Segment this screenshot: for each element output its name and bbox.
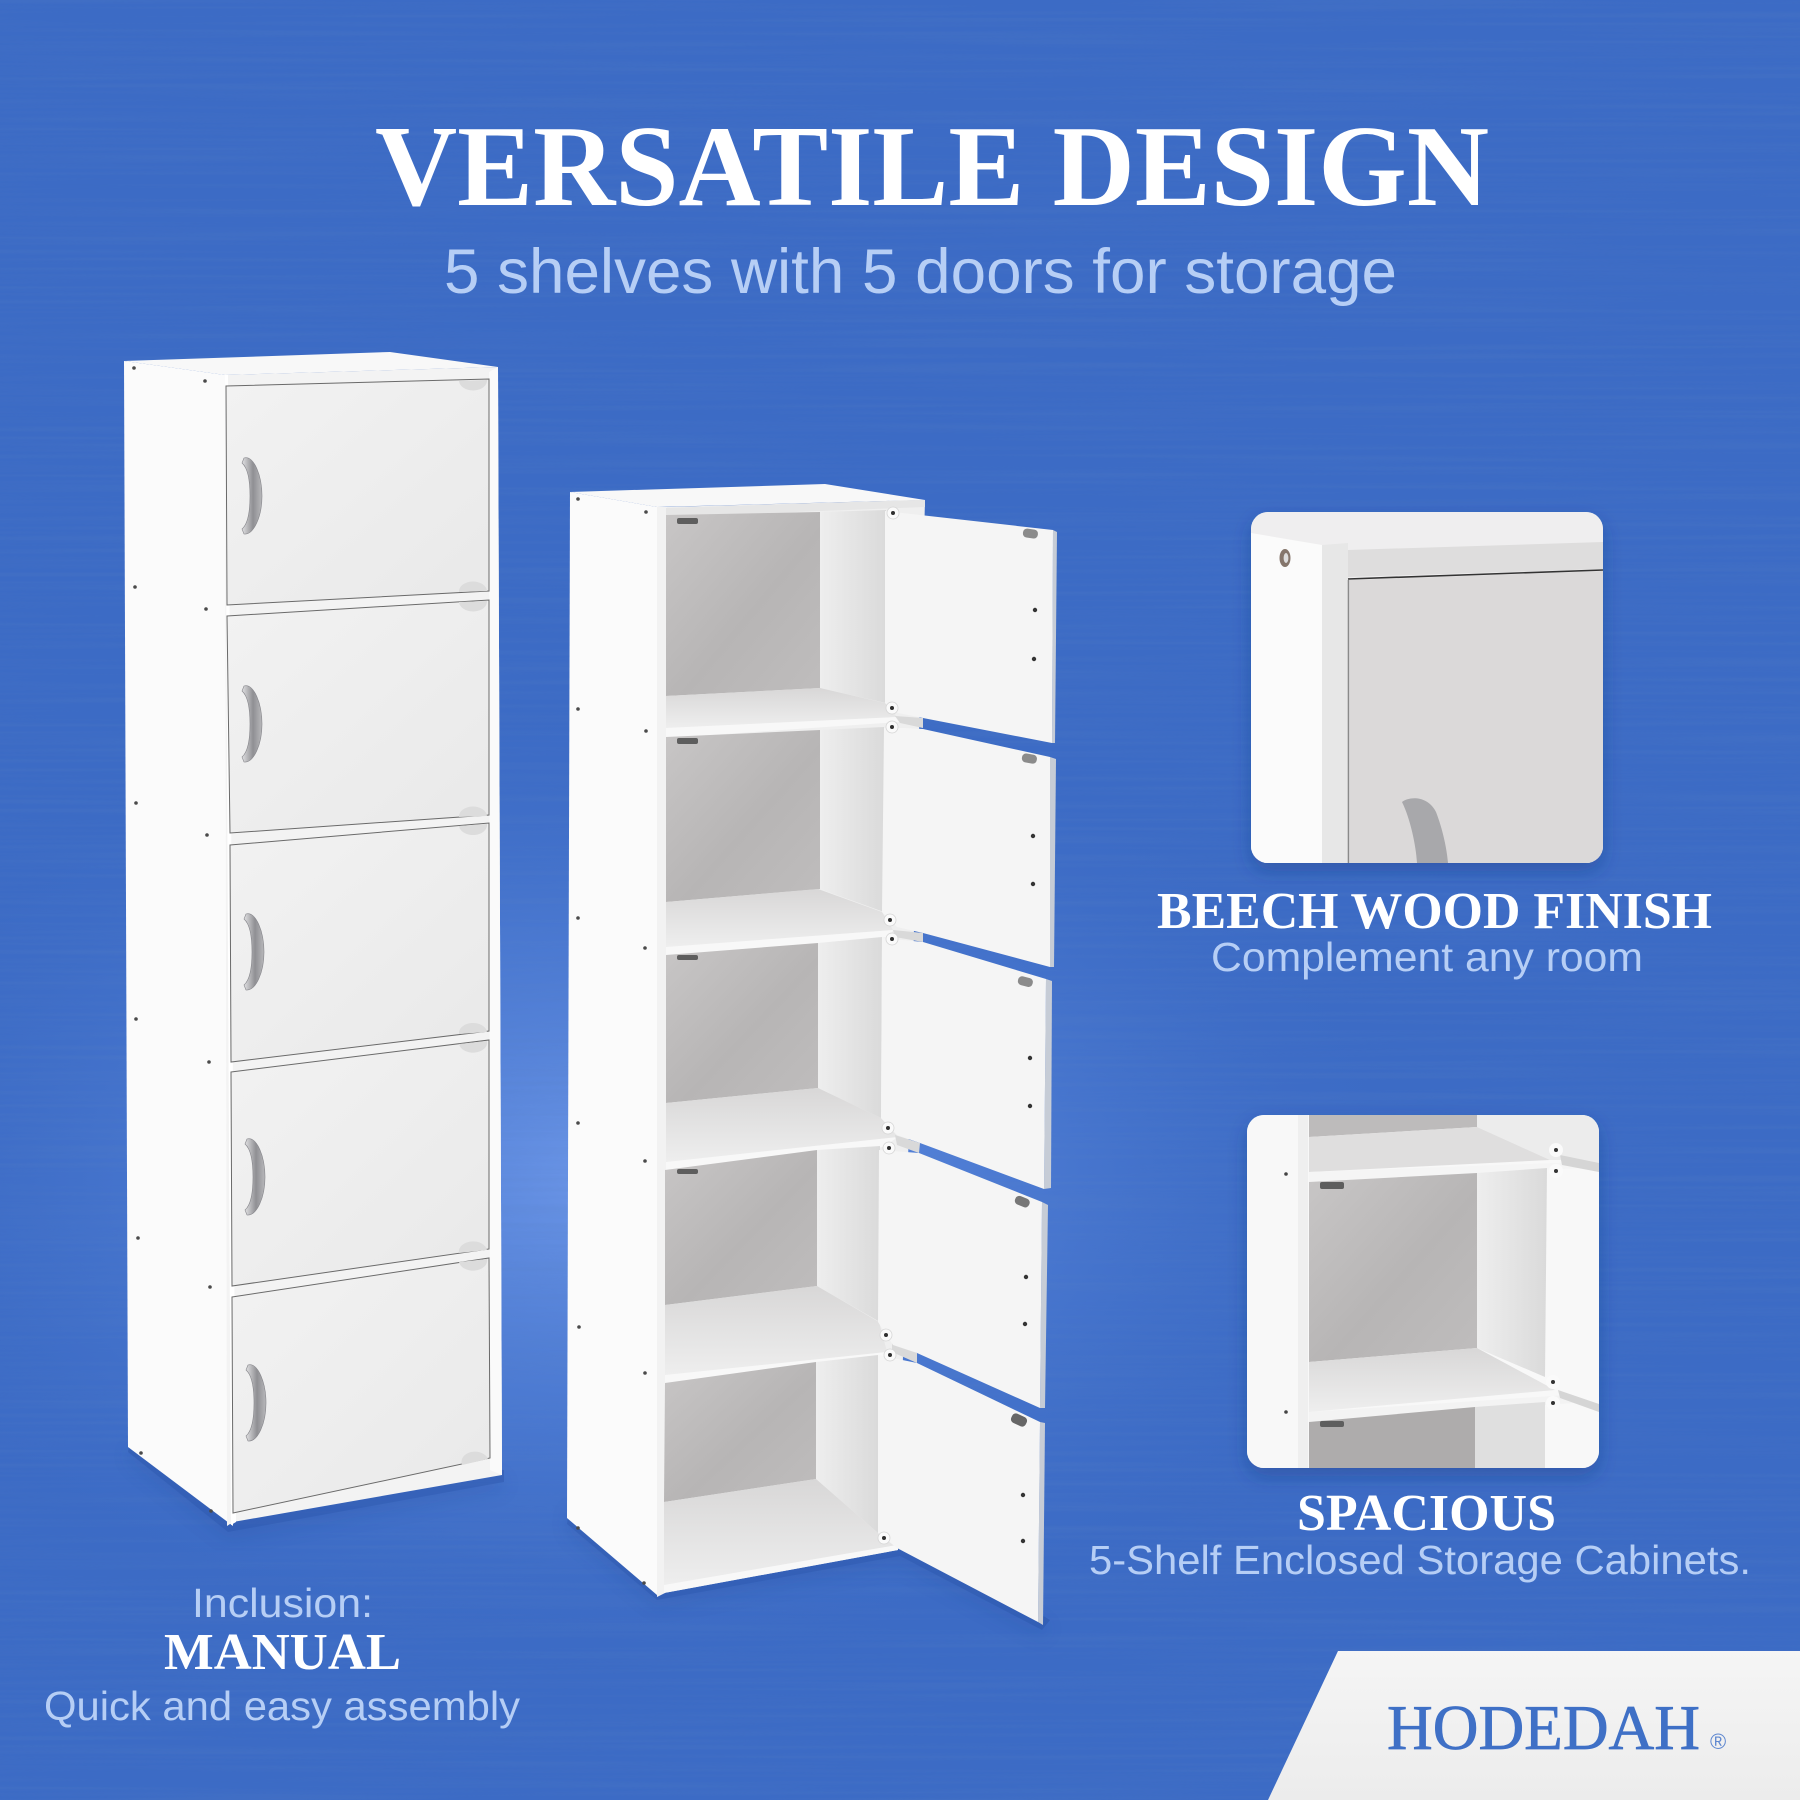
side screws (132, 366, 213, 1513)
open cabinet screws (576, 497, 648, 1585)
title: VERSATILE DESIGN (375, 103, 1489, 231)
caption: inclusion: Inclusion: (192, 1580, 373, 1626)
logo wordmark: HODEDAH (1387, 1693, 1700, 1763)
door 4 (231, 1040, 489, 1286)
cabinet side panel (124, 361, 233, 1526)
door brackets (892, 716, 923, 1363)
top front strip (666, 500, 925, 517)
door 5 (232, 1258, 490, 1513)
door 1 (226, 379, 489, 605)
open cabinet top (570, 484, 925, 507)
heading: manual: MANUAL (164, 1624, 401, 1681)
caption: enclosed storage: 5-Shelf Enclosed Storage Cabinets. (1089, 1537, 1751, 1583)
compartment 5 (664, 1355, 898, 1593)
cabinet top (124, 352, 498, 375)
panel: spacious detail photo (1247, 1115, 1599, 1468)
open five-door cabinet (567, 484, 1057, 1630)
heading: spacious: SPACIOUS (1297, 1485, 1556, 1542)
open cabinet front post (657, 507, 667, 1597)
open cabinet shadow (567, 1500, 1050, 1630)
caption: complement any room: Complement any room (1211, 934, 1643, 980)
heading: beech wood finish: BEECH WOOD FINISH (1157, 883, 1712, 940)
cabinet front frame (225, 367, 502, 1526)
hinge pins (882, 511, 895, 1540)
cabinet shadow (128, 1440, 504, 1532)
compartment 4 (665, 1146, 890, 1386)
subtitle: 5 shelves with 5 doors for storage (444, 237, 1397, 307)
registered mark: ® (1710, 1729, 1726, 1754)
open door 4 (878, 1150, 1048, 1408)
compartment 1 (666, 510, 900, 738)
brand tag (1268, 1651, 1800, 1800)
closed five-door cabinet (124, 352, 504, 1532)
open door 5 (878, 1355, 1045, 1625)
door 2 (227, 600, 489, 833)
interior base (664, 500, 925, 1593)
door 3 (230, 823, 489, 1062)
open door 2 (882, 728, 1056, 967)
compartment 3 (666, 937, 898, 1171)
open door 1 (885, 511, 1057, 743)
open door 3 (881, 938, 1052, 1189)
compartment 2 (666, 727, 893, 956)
hinges (878, 507, 899, 1544)
caption: assembly: Quick and easy assembly (44, 1683, 521, 1729)
open cabinet side panel (567, 492, 657, 1595)
panel: beech wood detail photo (1251, 512, 1603, 863)
